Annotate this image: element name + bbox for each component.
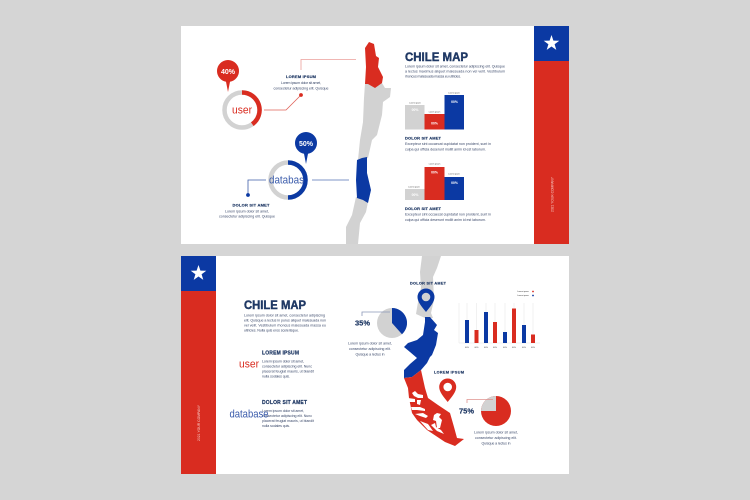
bar chart: columns: 00% (531, 347, 535, 349)
flag banner bottom (181, 256, 216, 474)
text: intro paragraph bottom: elit. Quisque a lectus in purus aliquet malesuada non (244, 318, 326, 322)
bar chart 1 (405, 92, 464, 130)
bar chart 2: 00% (412, 193, 418, 197)
pie: 75%: consectetur adipiscing elit. (475, 436, 517, 440)
item: user lorem ipsum: user (239, 359, 259, 371)
bar chart: columns: Lorem ipsum (517, 295, 529, 297)
flag banner top (534, 26, 569, 244)
item: database dolor sit amet: database (230, 408, 268, 420)
pin: red: LOREM IPSUM (434, 371, 464, 375)
text: dolor sit amet top (219, 202, 275, 218)
bar chart 2: 00% (451, 181, 458, 185)
bar chart 1: 00% (412, 108, 418, 112)
pin: 40%: 40% (221, 69, 236, 76)
text: intro paragraph bottom: vel velit. Vestibulum rhoncus malesuada massa eu (244, 324, 326, 328)
text: lorem ipsum top: consectetur adipiscing elit. Quisque (274, 86, 328, 90)
pin: 50% (295, 132, 317, 164)
bar chart 1: Lorem ipsum (429, 112, 441, 114)
pin: red (434, 371, 464, 402)
text: chart 1 caption: Excepteur sint occaecat cupidatat non proident, sunt in (405, 142, 491, 146)
heading: Chile map top: CHILE MAP (405, 50, 468, 64)
donut: user 40% (224, 92, 260, 128)
bar chart: columns: Lorem ipsum (517, 291, 529, 293)
flag banner bottom: 2021 YOUR COMPANY (197, 404, 201, 441)
item: database dolor sit amet (230, 400, 314, 428)
text: chart 1 caption: DOLOR SIT AMET (405, 136, 442, 140)
donut: database 50%: databas (269, 175, 304, 187)
bar chart 2: Lorem ipsum (448, 174, 460, 176)
pie: 75% (459, 396, 518, 446)
pie: 75%: 75% (459, 406, 474, 416)
bar chart 1: Lorem ipsum (448, 92, 460, 94)
item: user lorem ipsum: nulla sodales quis. (262, 374, 290, 378)
bar chart 2: Lorem ipsum (408, 186, 420, 188)
item: database dolor sit amet: DOLOR SIT AMET (262, 400, 307, 406)
text: intro paragraph top: rhoncus malesuada massa eu ultricies. (405, 74, 461, 78)
item: database dolor sit amet: consectetur adipiscing elit. Nunc (262, 414, 312, 418)
leader: database to text (246, 180, 349, 197)
text: chart 2 caption: Excepteur sint occaecat cupidatat non proident, sunt in (405, 212, 491, 216)
donut: user 40%: user (232, 105, 252, 117)
text: intro paragraph bottom: Lorem ipsum dolor sit amet, consectetur adipiscing (244, 314, 325, 318)
item: user lorem ipsum: Lorem ipsum dolor sit amet, (262, 360, 304, 364)
bar chart: columns: 00% (484, 347, 488, 349)
item: database dolor sit amet: placerat feugiat mauris, ut blandit (262, 419, 314, 423)
bar chart 1: Lorem ipsum (409, 102, 421, 104)
item: user lorem ipsum: placerat feugiat mauris, ut blandit (262, 370, 314, 374)
text: intro paragraph bottom (244, 314, 326, 332)
text: dolor sit amet top: DOLOR SIT AMET (232, 202, 270, 208)
text: lorem ipsum top: Lorem ipsum dolor sit amet, (281, 81, 321, 85)
bar chart 2: Lorem ipsum (429, 164, 441, 166)
bar chart: columns: 00% (522, 347, 526, 349)
text: lorem ipsum top: LOREM IPSUM (286, 74, 317, 79)
flag banner top: 2021 YOUR COMPANY (550, 176, 554, 212)
pin: blue (410, 282, 447, 312)
text: chart 1 caption: culpa qui officia deserunt mollit anim id est laborum. (405, 148, 486, 152)
bar chart: columns: 00% (512, 347, 516, 349)
item: database dolor sit amet: nulla sodales quis. (262, 424, 290, 428)
item: user lorem ipsum (239, 350, 314, 378)
pin: blue: DOLOR SIT AMET (410, 282, 447, 286)
text: chart 2 caption: culpa qui officia deserunt mollit anim id est laborum. (405, 218, 486, 222)
bar chart 2: 00% (431, 170, 438, 174)
bar chart 2 (405, 164, 464, 200)
bar chart: columns: 00% (503, 347, 507, 349)
text: chart 2 caption (405, 206, 491, 222)
pie: 35%: 35% (355, 318, 370, 328)
leader: user to text (264, 60, 356, 110)
text: dolor sit amet top: Lorem ipsum dolor sit amet, (225, 210, 269, 214)
bar chart: columns: 00% (493, 347, 497, 349)
text: intro paragraph top (405, 64, 505, 78)
panel: bottom slide (181, 256, 569, 474)
bar chart 1: 00% (451, 100, 458, 104)
item: database dolor sit amet: Lorem ipsum dolor sit amet, (262, 409, 304, 413)
pie: 35%: consectetur adipiscing elit. (349, 347, 391, 351)
pie: 35% (348, 308, 407, 356)
text: lorem ipsum top (274, 74, 328, 90)
map: Chile top (346, 42, 391, 244)
bar chart: columns: 00% (474, 347, 479, 349)
text: intro paragraph top: a lectus maximus aliquet malesuada non vel velit. Vestibulum (405, 70, 505, 74)
text: intro paragraph bottom: ultricies. Nulla quis eros scelerisque. (244, 328, 299, 332)
text: dolor sit amet top: consectetur adipiscing elit. Quisque (219, 214, 275, 218)
bar chart: columns (459, 291, 540, 349)
item: user lorem ipsum: consectetur adipiscing elit. Nunc (262, 364, 312, 368)
donut: database 50% (269, 162, 306, 198)
pin: 40% (217, 60, 239, 92)
panel: top slide (181, 26, 569, 244)
pie: 75%: Quisque a lectus in (482, 442, 510, 446)
item: user lorem ipsum: LOREM IPSUM (262, 350, 299, 356)
text: chart 2 caption: DOLOR SIT AMET (405, 206, 442, 211)
heading: Chile map bottom: CHILE MAP (244, 298, 306, 312)
bar chart: columns: 00% (465, 347, 469, 349)
pie: 35%: Quisque a lectus in (356, 352, 384, 356)
pie: 35%: Lorem ipsum dolor sit amet, (348, 342, 392, 346)
pin: 50%: 50% (299, 141, 314, 148)
bar chart 1: 00% (431, 122, 438, 126)
text: intro paragraph top: Lorem ipsum dolor sit amet, consectetur adipiscing elit. Quisque (405, 64, 505, 68)
map: Chile bottom (404, 256, 464, 446)
pie: 75%: Lorem ipsum dolor sit amet, (474, 430, 518, 434)
text: chart 1 caption (405, 136, 491, 152)
